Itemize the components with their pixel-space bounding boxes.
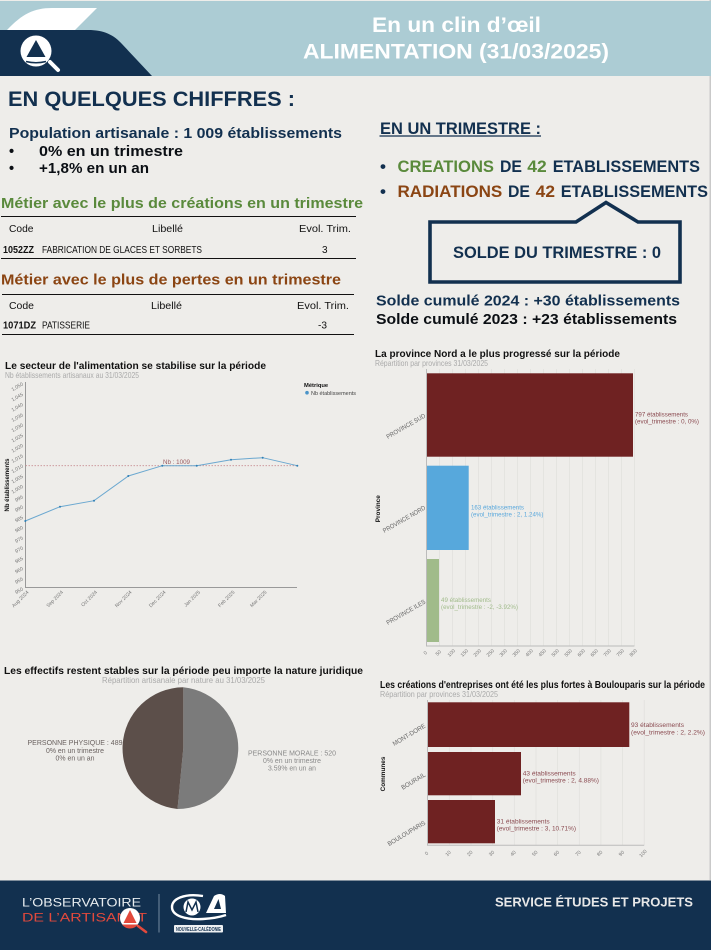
key figures: population: +1,8% en un an [39,161,149,177]
x axis labels: 80 [596,850,604,858]
footer [0,880,711,950]
chart subtitle: Répartition artisanale par nature au 31/03/2025 [102,675,265,685]
x axis labels: Dec 2024 [148,590,168,609]
x axis labels: 50 [435,649,443,657]
icon: red magnifier [120,908,146,932]
y axis labels: 960 [14,566,25,575]
x axis labels [424,849,649,859]
x axis labels: 0 [424,851,430,857]
label: personne physique [28,740,123,763]
list: creations and radiations: ETABLISSEMENTS [553,157,700,176]
y axis labels: 965 [14,556,25,565]
y axis title: Province [375,495,382,522]
x axis labels: Mar 2025 [249,590,269,609]
x axis labels: Oct 2024 [80,590,99,608]
x axis labels: 650 [590,648,600,658]
category labels [387,723,427,848]
y axis labels: 1,050 [11,381,25,393]
bar labels: (evol_trimestre : 2, 1.24%) [471,512,544,519]
table: top creations [1,216,356,258]
chart title: La province Nord a le plus progressé sur la période [375,348,620,360]
x axis labels: 20 [466,850,475,858]
heading: top losses: Métier avec le plus de pertes en un trimestre [1,272,341,288]
table: top creations: FABRICATION DE GLACES ET SORBETS [42,245,202,256]
x axis labels: 70 [575,850,583,858]
x axis labels: 10 [445,850,453,858]
y axis labels: 1,040 [11,402,25,413]
bar labels [497,722,705,833]
table: top creations: 1052ZZ [3,245,34,256]
chart subtitle: Nb établissements artisanaux au 31/03/2025 [5,370,139,380]
y axis labels: 995 [14,494,25,504]
table: top creations: Code [9,223,34,235]
legend: Nb établissements [311,391,356,397]
title [303,14,609,64]
bar labels: 163 établissements [471,505,525,512]
x axis labels: 700 [603,648,613,658]
x axis labels: Feb 2025 [217,590,237,609]
bar labels: (evol_trimestre : 0, 0%) [635,418,699,426]
x axis labels: 300 [499,648,509,658]
logo ribbon [0,8,152,76]
y axis labels: 1,005 [11,474,25,485]
divider [158,894,160,932]
x axis labels: 450 [538,648,548,658]
cumulative balances [376,294,680,328]
pie slices [123,687,238,809]
bar labels: (evol_trimestre : -2, -3.92%) [441,604,518,611]
x axis labels: 90 [618,850,626,858]
label: personne morale: PERSONNE MORALE : 520 [248,750,336,758]
bars [427,373,633,642]
panel: province bar chart [375,348,699,658]
y axis labels [11,381,25,596]
x axis labels: Aug 2024 [11,590,31,609]
heading: en quelques chiffres: EN QUELQUES CHIFFRES : [8,88,295,111]
table: top losses [2,294,354,334]
x axis labels: 400 [525,648,535,658]
x axis labels: 50 [531,850,540,858]
label: personne morale: 0% en un trimestre [263,758,321,765]
x axis labels: 800 [629,648,639,658]
key figures: population: Population artisanale : 1 009 établissements [9,125,342,142]
bar labels: (evol_trimestre : 2, 4.88%) [523,777,599,784]
x axis labels [423,648,639,658]
key figures: population [9,125,342,177]
panel: pie chart [4,665,363,809]
axes [428,700,644,845]
x axis labels: 350 [512,648,522,658]
list: creations and radiations: 42 [536,182,555,201]
title: En un clin d’œil [372,14,541,37]
x axis labels: 150 [460,648,470,658]
y axis title: Nb établissements [5,458,11,512]
category labels: PROVINCE NORD [382,505,427,535]
callout: solde du trimestre [430,202,680,282]
y axis labels: 985 [14,515,25,524]
category labels [382,412,427,627]
key figures: population: • [9,144,14,160]
bar labels: 797 établissements [635,412,689,418]
legend: Métrique [304,383,329,389]
y axis labels: 1,035 [11,412,25,424]
y axis labels: 970 [14,545,25,555]
x axis labels: 0 [423,650,429,656]
data line [24,457,298,522]
table: top losses: Code [9,300,34,312]
y axis labels: 975 [14,535,25,545]
x axis labels: Sep 2024 [46,590,65,609]
y axis labels: 980 [14,525,25,534]
x axis labels: 100 [638,849,649,859]
y axis labels: 1,010 [11,463,25,475]
list: creations and radiations: 42 [527,157,547,176]
x axis labels: 500 [551,648,561,658]
category labels: PROVINCE ILES [385,599,427,627]
y axis labels: 955 [14,576,25,586]
table: top losses: -3 [318,320,327,332]
list: creations and radiations: ETABLISSEMENTS [561,182,708,201]
x axis labels: 200 [473,648,483,658]
bar labels: 49 établissements [441,597,492,604]
cumulative balances: Solde cumulé 2023 : +23 établissements [376,312,677,328]
list: creations and radiations [380,157,708,201]
y axis labels: 950 [14,586,25,596]
table: top creations: Evol. Trim. [299,223,351,235]
observatoire wordmark: DE L’ARTISANAT [22,913,147,925]
chart title: Les effectifs restent stables sur la période peu importe la nature juridique [4,665,363,677]
callout: solde du trimestre: SOLDE DU TRIMESTRE : 0 [453,243,661,262]
y axis title: Communes [380,756,387,791]
chart title: Le secteur de l'alimentation se stabilise sur la période [5,360,266,372]
axes [26,382,297,588]
x axis labels: 600 [577,648,587,658]
chart subtitle: Répartition par provinces 31/03/2025 [375,358,488,368]
label: personne physique: PERSONNE PHYSIQUE : 489 [28,740,123,747]
bar labels: 43 établissements [523,770,576,777]
list: creations and radiations: DE [508,182,530,201]
list: creations and radiations: • [380,157,386,176]
list: creations and radiations: RADIATIONS [398,182,502,201]
chart subtitle: Répartition par provinces 31/03/2025 [380,689,498,699]
key figures: population: 0% en un trimestre [39,144,183,160]
header banner [0,1,711,76]
bars [428,702,629,843]
CMA logo [172,894,226,933]
table: top creations: Libellé [152,223,183,235]
label: personne physique: 0% en un an [56,756,95,763]
category labels: MONT-DORE [392,723,427,748]
y axis labels: 1,025 [11,433,25,444]
table: top losses: 1071DZ [3,320,36,332]
label: personne physique: 0% en un trimestre [46,748,104,755]
list: creations and radiations: CREATIONS [398,157,494,176]
category labels: PROVINCE SUD [385,412,427,441]
legend [304,383,356,397]
label: personne morale [248,750,336,773]
reference line at 1009: Nb : 1009 [163,459,190,466]
category labels: BOURAIL [400,771,427,792]
heading: top creations: Métier avec le plus de créations en un trimestre [1,196,363,212]
axes [426,369,634,646]
CMA logo: NOUVELLE-CALÉDONIE [176,925,222,933]
table: top losses: Evol. Trim. [297,300,349,312]
observatoire wordmark: L’OBSERVATOIRE [22,898,141,910]
label: personne morale: 3.59% en un an [268,766,316,773]
key figures: population: • [9,161,14,177]
x axis labels: 30 [488,850,496,858]
list: creations and radiations: DE [500,157,522,176]
panel: line chart [5,360,356,609]
y axis labels: 1,020 [11,443,25,454]
heading: en un trimestre: EN UN TRIMESTRE : [380,119,541,138]
category labels: BOULOUPARIS [387,820,427,848]
x axis labels [11,590,269,609]
table: top losses: PATISSERIE [42,320,90,332]
x axis labels: 550 [564,648,574,658]
icon: magnifier with letter A [20,36,58,70]
x axis labels: 750 [616,648,626,658]
x axis labels: Jan 2025 [183,590,202,608]
list: creations and radiations: • [380,182,386,201]
table: top losses: Libellé [151,300,182,312]
y axis labels: 1,000 [11,484,25,495]
x axis labels: 40 [510,850,518,858]
cumulative balances: Solde cumulé 2024 : +30 établissements [376,294,680,310]
bar labels: (evol_trimestre : 3, 10.71%) [497,826,576,833]
x axis labels: 60 [553,850,561,858]
panel: communes bar chart [380,679,705,859]
observatoire wordmark [22,898,147,925]
x axis labels: Nov 2024 [114,590,134,609]
y axis labels: 1,045 [11,392,25,403]
y axis labels: 1,015 [11,453,25,465]
service label: SERVICE ÉTUDES ET PROJETS [495,895,693,910]
bar labels: 93 établissements [631,722,685,729]
table: top creations: 3 [322,245,328,256]
x axis labels: 250 [486,648,496,658]
y axis labels: 990 [14,504,25,514]
bar labels [441,412,699,611]
bar labels: (evol_trimestre : 2, 2.2%) [631,729,705,736]
y axis labels: 1,030 [11,422,25,434]
title: ALIMENTATION (31/03/2025) [303,41,609,64]
bar labels: 31 établissements [497,818,550,825]
x axis labels: 100 [447,648,457,658]
